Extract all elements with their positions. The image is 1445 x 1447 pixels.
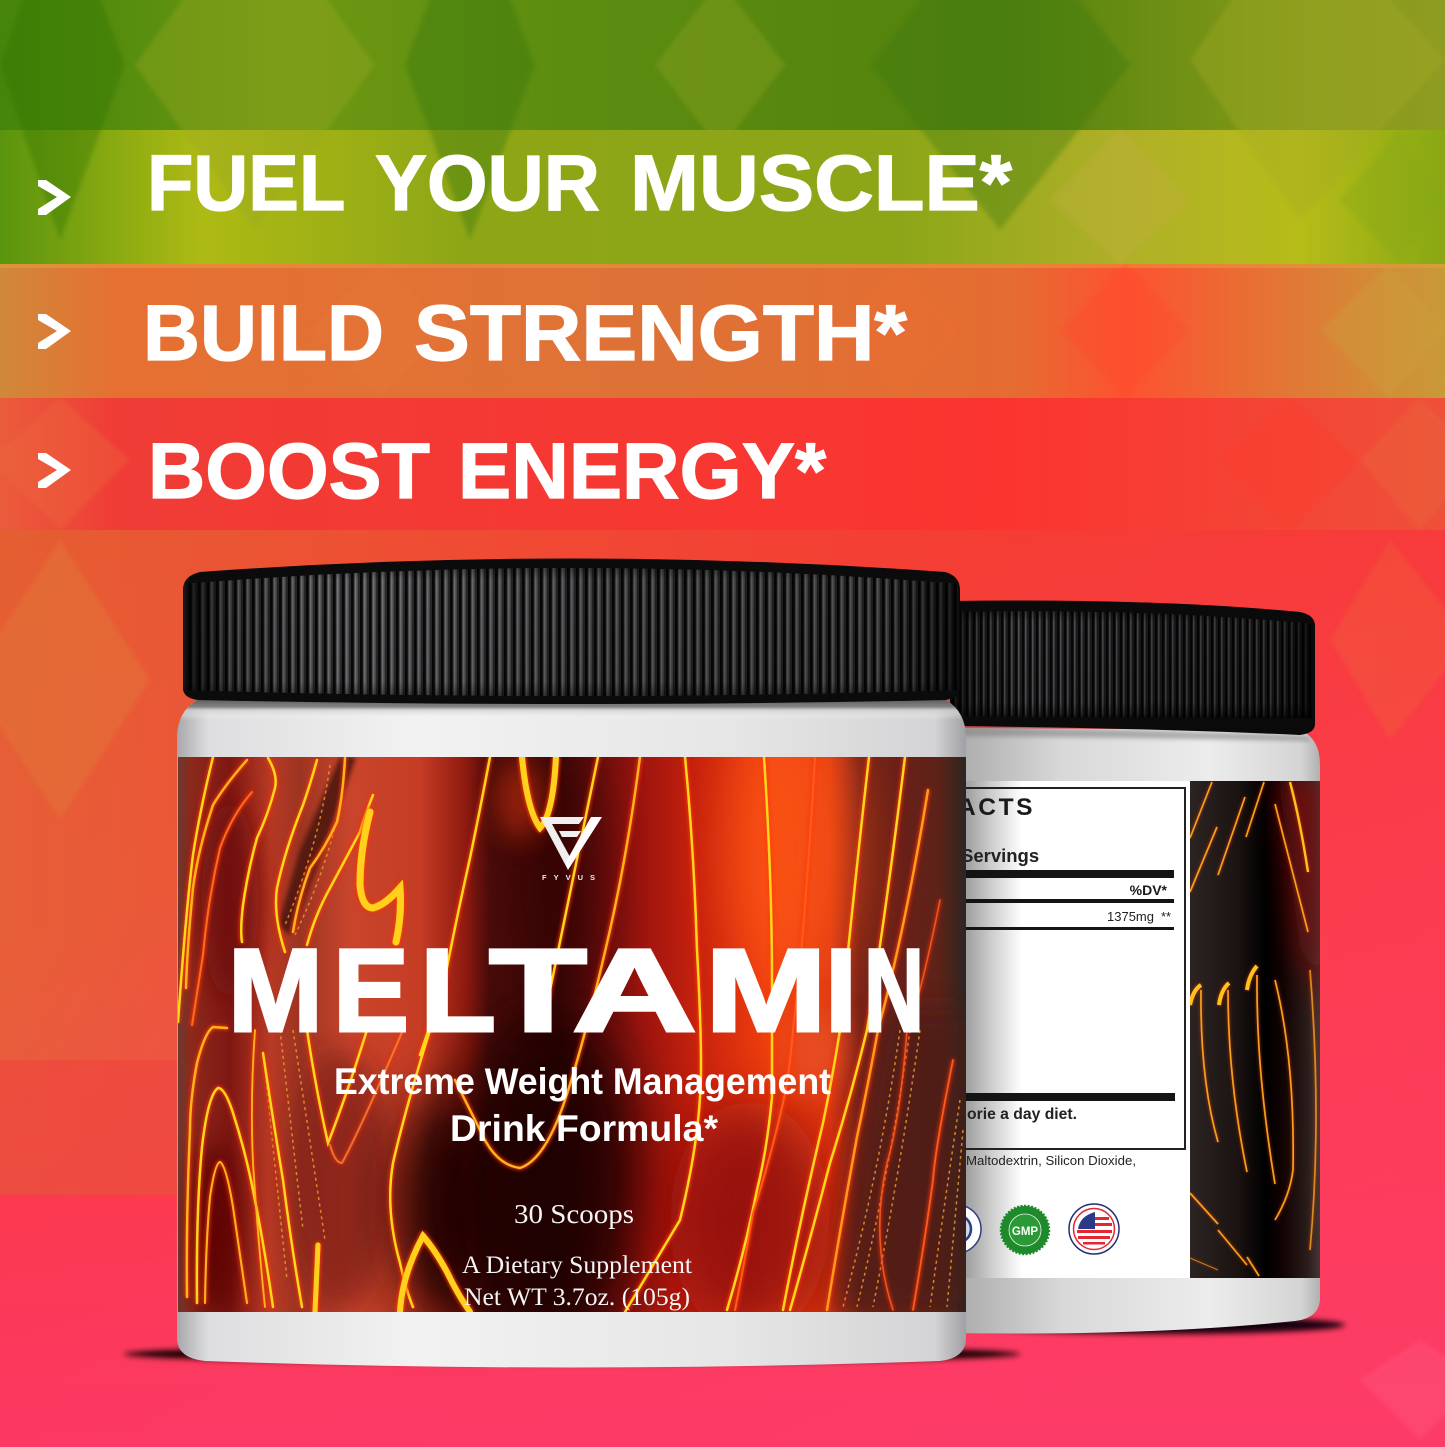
heading: build strength: BUILD	[143, 288, 384, 377]
ingredients text: Maltodextrin, Silicon Dioxide,	[966, 1153, 1136, 1168]
supplement facts panel: %DV*	[1130, 882, 1168, 898]
supplement facts panel	[950, 788, 1185, 1149]
supplement facts panel: orie a day diet.	[967, 1106, 1077, 1123]
back jar lid	[950, 600, 1315, 735]
front jar lid	[183, 558, 960, 704]
supplement facts panel: ACTS	[958, 794, 1035, 821]
product name: E	[333, 925, 409, 1057]
front jar neck shading	[181, 700, 962, 718]
icon: GMP badge	[1001, 1206, 1049, 1254]
icon: GMP badge: GMP	[1012, 1226, 1038, 1238]
product name: M	[228, 925, 323, 1057]
icon: third chevron	[38, 453, 71, 488]
back jar shadow	[975, 1316, 1345, 1334]
product name: M	[705, 925, 827, 1057]
subtitle: Drink Formula*	[450, 1108, 719, 1149]
brand logo	[540, 817, 602, 882]
heading: fuel your muscle: YOUR	[375, 138, 600, 227]
product name: T	[489, 925, 587, 1057]
back label white panel	[950, 781, 1190, 1278]
product name: A	[572, 925, 697, 1057]
front jar body	[177, 700, 966, 1368]
product: front jar	[124, 558, 1020, 1368]
back jar body	[950, 728, 1320, 1334]
supplement facts panel: Servings	[961, 845, 1039, 866]
subtitle: Extreme Weight Management	[334, 1061, 831, 1102]
brand logo: FYVUS	[542, 873, 602, 882]
product name: L	[420, 925, 496, 1057]
stitched dashed strands	[233, 765, 963, 1307]
icon: USA flag badge	[1069, 1204, 1119, 1254]
icon: partial blue badge	[933, 1205, 981, 1253]
heading: boost energy: BOOST	[148, 426, 430, 515]
heading: boost energy: ENERGY*	[458, 426, 826, 515]
product name: I	[825, 925, 857, 1057]
subtitle	[334, 1061, 831, 1149]
product: back jar	[933, 600, 1345, 1334]
back label dark artwork	[1190, 775, 1325, 1278]
icon: first chevron	[38, 180, 71, 215]
bright flames	[315, 757, 556, 1312]
product name: N	[864, 925, 924, 1057]
serving information: Net WT 3.7oz. (105g)	[464, 1284, 690, 1311]
heading: fuel your muscle: MUSCLE*	[630, 138, 1012, 227]
supplement facts panel: **	[1161, 909, 1171, 924]
front jar shadow	[124, 1345, 1020, 1363]
heading: build strength: STRENGTH*	[414, 288, 907, 377]
supplement facts panel: 1375mg	[1107, 909, 1154, 924]
heading: fuel your muscle: FUEL	[147, 138, 344, 227]
front label artwork with flowing lines	[178, 757, 966, 1312]
serving information	[462, 1199, 692, 1311]
icon: second chevron	[38, 314, 71, 349]
back jar neck shading	[950, 727, 1312, 741]
serving information: A Dietary Supplement	[462, 1252, 692, 1279]
serving information: 30 Scoops	[514, 1199, 634, 1229]
